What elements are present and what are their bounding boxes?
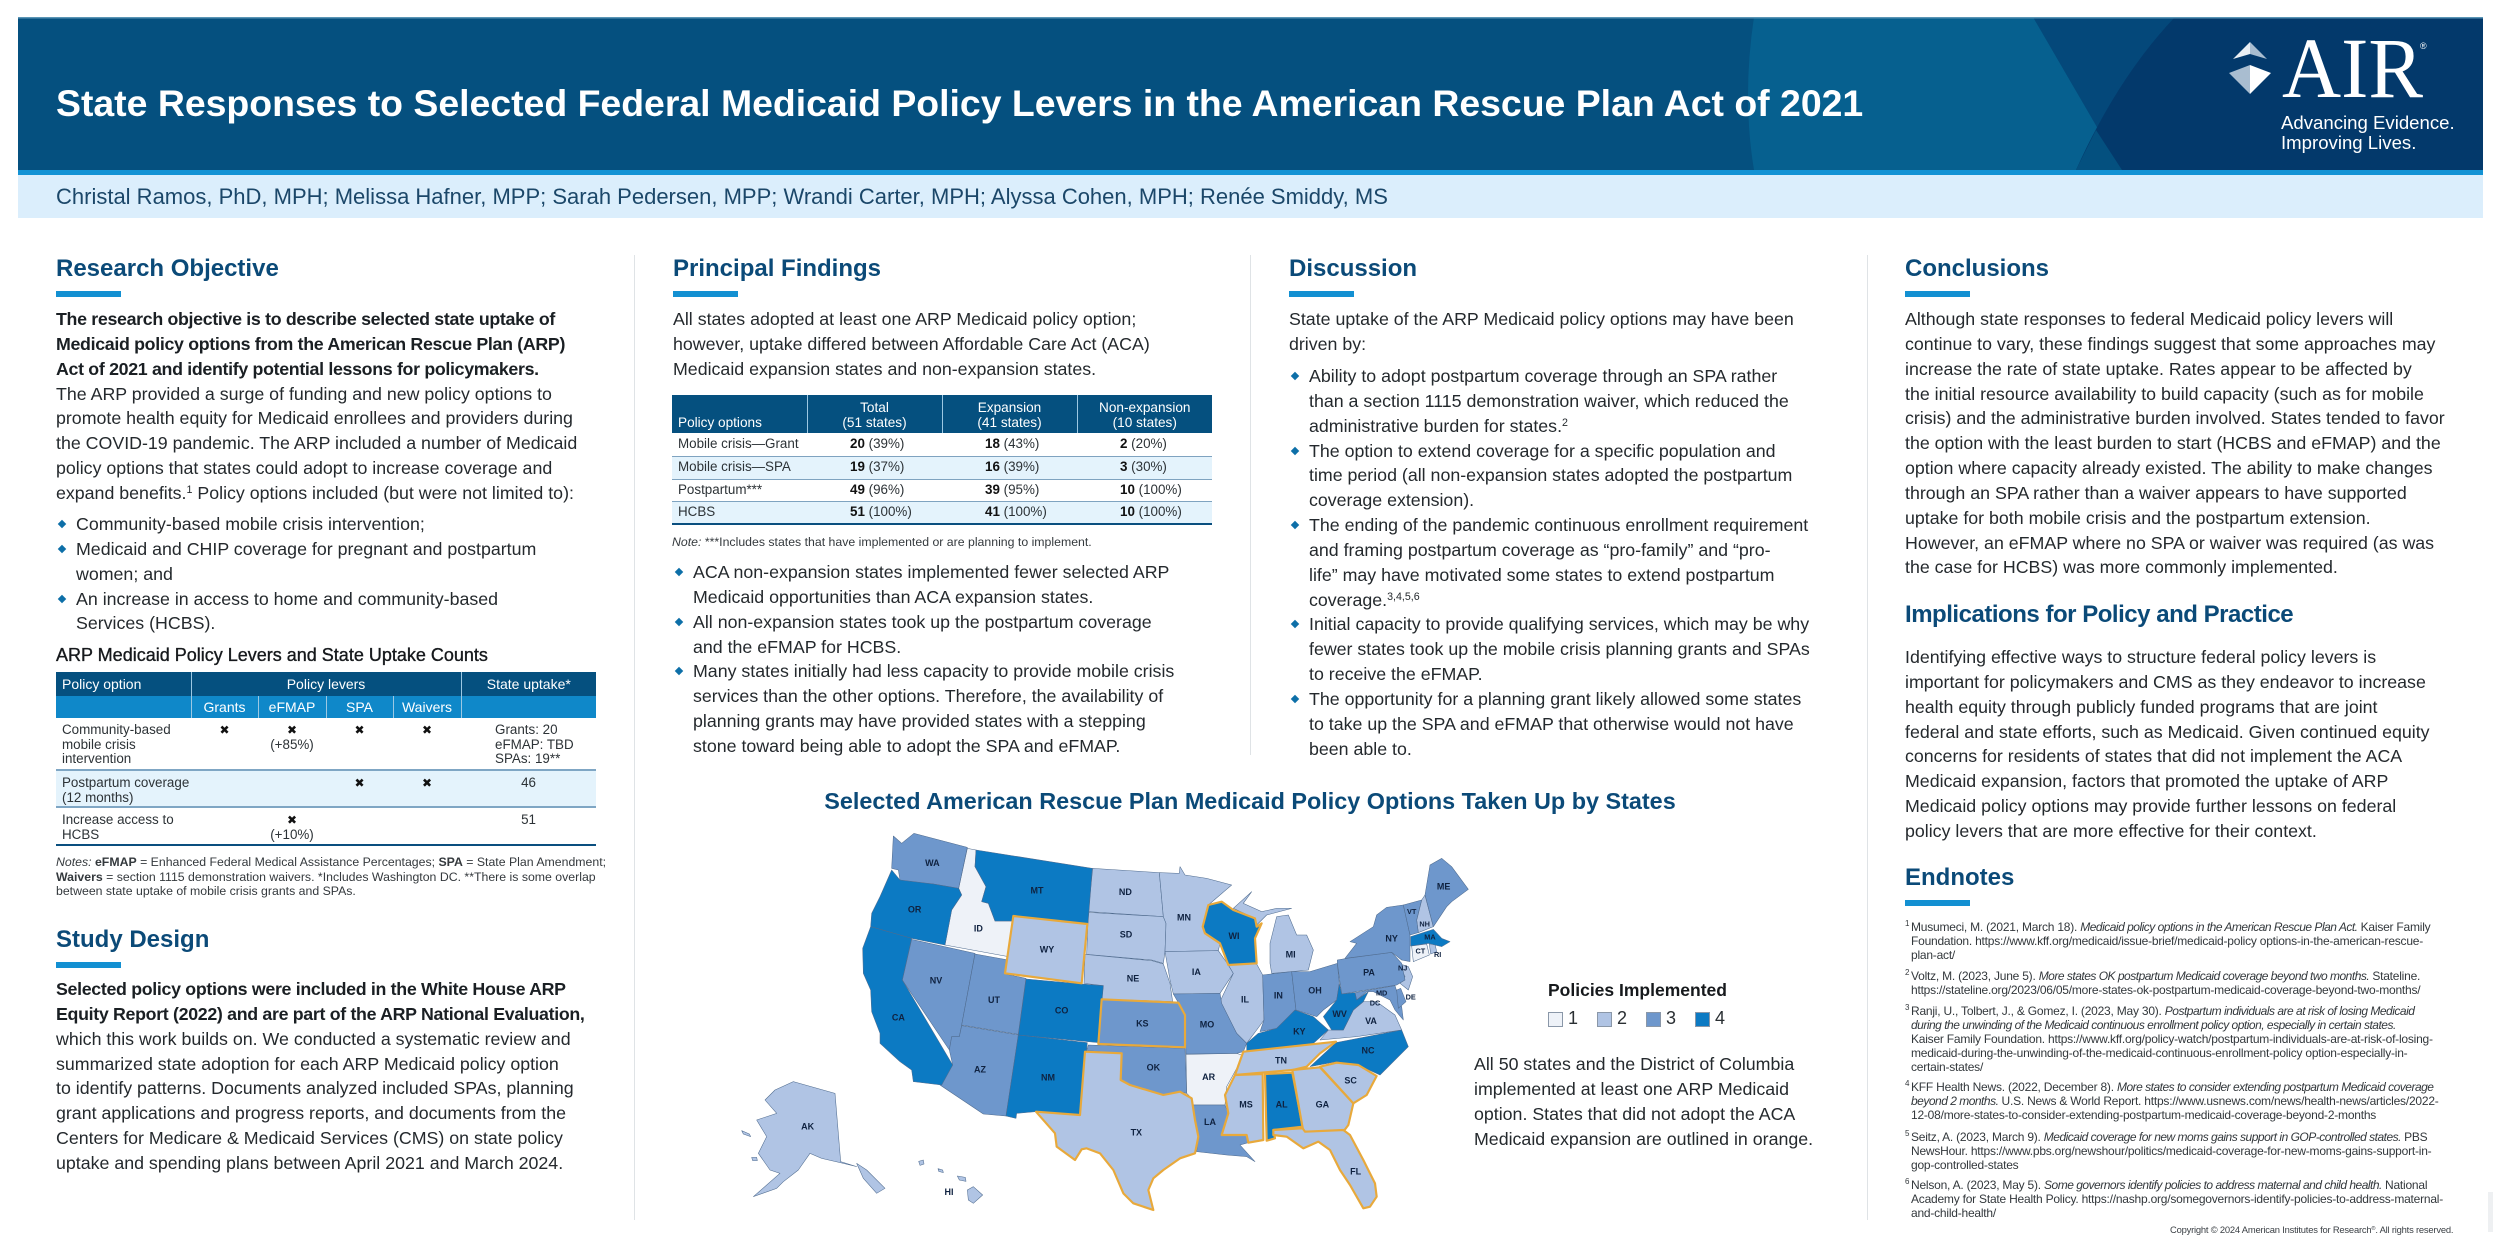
endnote 3: Kaiser Family Foundation. https://www.kff.org/policy-watch/postpartum-individuals-are-at-risk-of-losing-: [1911, 1032, 2433, 1046]
AIR logo: [2229, 32, 2455, 153]
table: state uptake: 10 (100%): [1120, 504, 1182, 519]
study design paragraph: to identify patterns. Documents analyzed included SPAs, planning: [56, 1078, 574, 1098]
endnote 6: [1905, 1177, 2443, 1220]
state abbreviations: MI: [1286, 950, 1296, 960]
implications paragraph: Identifying effective ways to structure federal policy levers is: [1905, 647, 2376, 667]
state abbreviations: HI: [944, 1187, 954, 1197]
table: policy levers: eFMAP: TBD: [495, 736, 574, 752]
AIR logo: Improving Lives.: [2281, 132, 2416, 153]
map caption: option. States that did not adopt the ACA: [1474, 1104, 1795, 1124]
endnote 4: 4: [1905, 1079, 1909, 1088]
implications paragraph: policy levers that are more effective for their context.: [1905, 821, 2317, 841]
panel: map: [741, 788, 1676, 1212]
table: state uptake: Policy options: [678, 414, 762, 430]
endnote 6: and-child-health/: [1911, 1206, 1996, 1220]
conclusions paragraph: continue to vary, these findings suggest that some approaches may: [1905, 334, 2435, 354]
conclusions paragraph: However, an eFMAP where no SPA or waiver was required (as was: [1905, 533, 2434, 553]
state abbreviations: WA: [925, 858, 940, 868]
AIR logo: Advancing Evidence.: [2281, 112, 2455, 133]
heading: study design: Study Design: [56, 926, 209, 953]
states: 1 policy: [945, 848, 1429, 1105]
table: policy levers: 46: [521, 775, 536, 790]
state abbreviations: KS: [1136, 1018, 1149, 1028]
table: state uptake: Total: [860, 400, 889, 415]
state abbreviations: GA: [1316, 1100, 1330, 1110]
endnote 1: 1: [1905, 919, 1909, 928]
state abbreviations: FL: [1350, 1166, 1362, 1176]
table: policy levers: Postpartum coverage: [62, 775, 189, 790]
map caption: All 50 states and the District of Columbia: [1474, 1054, 1794, 1074]
endnote 5: [1905, 1129, 2432, 1172]
state abbreviations: CO: [1055, 1005, 1068, 1015]
objective paragraph: Act of 2021 and identify potential lessons for policymakers.: [56, 359, 539, 379]
table: state uptake: 41 (100%): [985, 504, 1047, 519]
discussion list: time period (all non-expansion states adopted the postpartum: [1309, 465, 1792, 485]
discussion list: life” may have motivated some states to extend postpartum: [1309, 565, 1774, 585]
endnote 4: [1905, 1079, 2439, 1122]
conclusions paragraph: the case for HCBS) was more commonly implemented.: [1905, 557, 2338, 577]
state abbreviations: NE: [1127, 974, 1139, 984]
panel: research objective: [56, 255, 606, 898]
objective paragraph: The ARP provided a surge of funding and new policy options to: [56, 384, 552, 404]
text: 2: [1617, 1008, 1627, 1028]
state abbreviations: WV: [1332, 1009, 1347, 1019]
endnote 6: Nelson, A. (2023, May 5). Some governors identify policies to address maternal and child health. National: [1911, 1178, 2427, 1192]
table: state uptake: (10 states): [1113, 414, 1177, 430]
state abbreviations: MT: [1030, 885, 1044, 895]
table: policy levers: ✖: [422, 723, 432, 737]
discussion intro: driven by:: [1289, 334, 1366, 354]
discussion list: [1290, 366, 1810, 759]
table heading: ARP Medicaid Policy Levers and State Uptake Counts: [56, 645, 488, 665]
state abbreviations: NY: [1385, 933, 1398, 943]
findings list: services than the other options. Therefore, the availability of: [693, 686, 1163, 706]
discussion list: The option to extend coverage for a specific population and: [1309, 441, 1776, 461]
state abbreviations: AL: [1276, 1100, 1288, 1110]
table: state uptake: 51 (100%): [850, 504, 912, 519]
state abbreviations: MO: [1200, 1019, 1214, 1029]
heading: implications: Implications for Policy and Practice: [1905, 601, 2293, 628]
table: policy levers: Policy option: [62, 676, 141, 692]
state abbreviations: NV: [930, 976, 942, 986]
endnote 3: during the unwinding of the Medicaid continuous enrollment policy option, especially in certain states.: [1911, 1018, 2396, 1032]
state abbreviations: [801, 858, 1450, 1197]
state abbreviations: NM: [1041, 1072, 1055, 1082]
discussion list: and framing postpartum coverage as “pro-family” and “pro-: [1309, 540, 1771, 560]
policy options list: [58, 514, 536, 633]
state abbreviations: SD: [1120, 929, 1133, 939]
state abbreviations: MA: [1424, 933, 1436, 942]
table: state uptake: 10 (100%): [1120, 482, 1182, 497]
policy options list: Services (HCBS).: [76, 613, 215, 633]
table: state uptake: 18 (43%): [985, 436, 1039, 451]
table: state uptake: (41 states): [977, 414, 1042, 430]
table: policy levers: ✖: [287, 813, 297, 827]
table: state uptake: 20 (39%): [850, 436, 904, 451]
conclusions paragraph: through an SPA rather than a waiver appears to have supported: [1905, 483, 2407, 503]
state abbreviations: TN: [1275, 1055, 1287, 1065]
AIR logo: ®: [2420, 41, 2427, 51]
state abbreviations: IL: [1241, 995, 1250, 1005]
implications paragraph: [1905, 647, 2430, 841]
state abbreviations: AK: [801, 1121, 815, 1131]
table: policy levers: Grants: [203, 699, 246, 715]
policy options list: An increase in access to home and community-based: [76, 589, 498, 609]
state abbreviations: LA: [1204, 1117, 1216, 1127]
table: policy levers: [56, 672, 596, 846]
table notes: [56, 855, 606, 898]
panel: study design: [56, 926, 585, 1173]
state abbreviations: ID: [974, 924, 983, 934]
table notes: Waivers = section 1115 demonstration waivers. *Includes Washington DC. **There is some overlap: [56, 870, 596, 884]
table: state uptake: Non-expansion: [1099, 400, 1190, 415]
endnote 1: Musumeci, M. (2021, March 18). Medicaid policy options in the American Rescue Plan Act. Kaiser Family: [1911, 920, 2430, 934]
conclusions paragraph: uptake for both mobile crisis and the postpartum extension.: [1905, 508, 2371, 528]
conclusions paragraph: the option with the least burden to start (HCBS and eFMAP) and the: [1905, 433, 2441, 453]
conclusions paragraph: increase the rate of state uptake. Rates appear to be affected by: [1905, 359, 2412, 379]
state abbreviations: CT: [1415, 946, 1426, 955]
endnote 3: [1905, 1003, 2433, 1074]
endnote 4: 12-08/more-states-to-consider-extending-postpartum-medicaid-coverage-beyond-2-months: [1911, 1108, 2376, 1122]
policy options list: Community-based mobile crisis intervention;: [76, 514, 425, 534]
study design paragraph: grant applications and progress reports, and documents from the: [56, 1103, 566, 1123]
table: state uptake: Mobile crisis—SPA: [678, 459, 791, 474]
objective paragraph: expand benefits.1 Policy options included (but were not limited to):: [56, 483, 574, 503]
discussion intro: [1289, 309, 1794, 354]
states: 4 policies: [863, 850, 1450, 1118]
study design paragraph: Equity Report (2022) and are part of the ARP National Evaluation,: [56, 1004, 585, 1024]
state abbreviations: WY: [1040, 944, 1054, 954]
table: state uptake: 2 (20%): [1120, 436, 1167, 451]
findings list: planning grants may have provided states with a stepping: [693, 711, 1146, 731]
legend title: Policies Implemented: [1548, 980, 1727, 1000]
states: 3 policies: [892, 833, 1468, 1162]
endnote 2: Voltz, M. (2023, June 5). More states OK postpartum Medicaid coverage beyond two months. Stateline.: [1911, 969, 2420, 983]
panel: conclusions: [1905, 255, 2445, 577]
table: state uptake: Expansion: [978, 400, 1041, 415]
state abbreviations: WI: [1228, 931, 1240, 941]
state abbreviations: AZ: [974, 1064, 986, 1074]
title: State Responses to Selected Federal Medicaid Policy Levers in the American Rescue Plan Act of 2021: [56, 82, 1863, 124]
study design paragraph: Selected policy options were included in the White House ARP: [56, 979, 566, 999]
discussion list: The opportunity for a planning grant likely allowed some states: [1309, 689, 1801, 709]
table: policy levers: Grants: 20: [495, 722, 558, 737]
table: policy levers: ✖: [422, 776, 432, 790]
header banner: [18, 17, 2483, 218]
policy options list: Medicaid and CHIP coverage for pregnant and postpartum: [76, 539, 536, 559]
endnote 4: KFF Health News. (2022, December 8). More states to consider extending postpartum Medicaid coverage: [1911, 1080, 2433, 1094]
implications paragraph: Medicaid policy options may provide further lessons on federal: [1905, 796, 2396, 816]
panel: endnotes: [1905, 864, 2014, 906]
states: 2 policies: [742, 867, 1437, 1203]
endnote 6: Academy for State Health Policy. https://nashp.org/somegovernors-identify-policies-to-address-maternal-: [1911, 1192, 2443, 1206]
state abbreviations: AR: [1202, 1072, 1216, 1082]
discussion list: fewer states took up the mobile crisis planning grants and SPAs: [1309, 639, 1810, 659]
state abbreviations: OK: [1147, 1062, 1161, 1072]
heading: principal findings: Principal Findings: [673, 255, 881, 282]
table: policy levers: ✖: [354, 776, 365, 790]
table: policy levers: eFMAP: [269, 699, 315, 715]
table: policy levers: Increase access to: [62, 812, 174, 827]
heading: research objective: Research Objective: [56, 255, 279, 282]
endnote 5: NewsHour. https://www.pbs.org/newshour/politics/medicaid-coverage-for-new-moms-gains-support-in-: [1911, 1144, 2431, 1158]
table: policy levers: SPA: [346, 699, 373, 715]
conclusions paragraph: crisis) and the administrative burden involved. States tended to favor: [1905, 408, 2445, 428]
endnote 3: certain-states/: [1911, 1060, 1983, 1074]
endnote 1: Foundation. https://www.kff.org/medicaid/issue-brief/medicaid-policy options-in-the-american-rescue-: [1911, 934, 2423, 948]
endnote 2: https://stateline.org/2023/06/05/more-states-ok-postpartum-medicaid-coverage-beyond-two-months/: [1911, 983, 2420, 997]
study design paragraph: [56, 979, 585, 1173]
table: state uptake: HCBS: [678, 504, 715, 519]
table: policy levers: (+85%): [270, 736, 314, 752]
state abbreviations: CA: [892, 1013, 905, 1023]
discussion list: Ability to adopt postpartum coverage through an SPA rather: [1309, 366, 1777, 386]
state abbreviations: NH: [1419, 919, 1430, 928]
state abbreviations: SC: [1344, 1075, 1357, 1085]
findings list: [674, 562, 1174, 756]
table: state uptake: 19 (37%): [850, 459, 904, 474]
table: policy levers: Community-based: [62, 722, 171, 737]
implications paragraph: health equity through publicly funded programs that are joint: [1905, 697, 2378, 717]
state abbreviations: IA: [1192, 967, 1201, 977]
endnote 2: [1905, 968, 2421, 997]
authors band: Christal Ramos, PhD, MPH; Melissa Hafner, MPP; Sarah Pedersen, MPP; Wrandi Carter, MPH; Alyssa Cohen, MPH; Renée Smiddy, MS: [56, 184, 1388, 209]
table notes: between state uptake of mobile crisis grants and SPAs.: [56, 884, 356, 898]
state abbreviations: OR: [908, 905, 922, 915]
objective paragraph: promote health equity for Medicaid enrollees and providers during: [56, 408, 573, 428]
state abbreviations: NC: [1362, 1046, 1375, 1056]
objective paragraph: Medicaid policy options from the American Rescue Plan (ARP): [56, 334, 565, 354]
conclusions paragraph: the initial resource availability to build capacity (such as for mobile: [1905, 384, 2424, 404]
table: policy levers: HCBS: [62, 826, 99, 842]
state abbreviations: RI: [1434, 950, 1441, 959]
endnote 3: medicaid-during-the-unwinding-of-the-medicaid-continuous-enrollment-policy option-especially-in-: [1911, 1046, 2407, 1060]
implications paragraph: federal and state efforts, such as Medicaid. Given continued equity: [1905, 722, 2430, 742]
table: state uptake: 49 (96%): [850, 482, 904, 497]
heading: discussion: Discussion: [1289, 255, 1417, 282]
endnote 1: [1905, 919, 2431, 962]
discussion list: Initial capacity to provide qualifying services, which may be why: [1309, 614, 1809, 634]
objective paragraph: the COVID-19 pandemic. The ARP included a number of Medicaid: [56, 433, 577, 453]
table notes: Notes: eFMAP = Enhanced Federal Medical Assistance Percentages; SPA = State Plan Amendment;: [56, 855, 606, 869]
endnote 3: Ranji, U., Tolbert, J., & Gomez, I. (2023, May 30). Postpartum individuals are at risk of losing Medicaid: [1911, 1004, 2414, 1018]
map caption: [1474, 1054, 1813, 1149]
panel: implications: [1905, 601, 2430, 841]
discussion list: been able to.: [1309, 739, 1412, 759]
state abbreviations: KY: [1293, 1027, 1306, 1037]
discussion list: administrative burden for states.2: [1309, 416, 1568, 436]
implications paragraph: concerns for residents of states that did not implement the ACA: [1905, 746, 2402, 766]
conclusions paragraph: Although state responses to federal Medicaid policy levers will: [1905, 309, 2393, 329]
heading: conclusions: Conclusions: [1905, 255, 2049, 282]
map title: Selected American Rescue Plan Medicaid Policy Options Taken Up by States: [824, 788, 1676, 814]
table: policy levers: mobile crisis: [62, 736, 136, 752]
table: policy levers: ✖: [219, 723, 230, 737]
conclusions paragraph: [1905, 309, 2445, 577]
table: state uptake: Mobile crisis—Grant: [678, 436, 799, 451]
map caption: Medicaid expansion are outlined in orange.: [1474, 1129, 1813, 1149]
table: policy levers: State uptake*: [487, 676, 571, 692]
state abbreviations: MN: [1177, 912, 1191, 922]
objective paragraph: The research objective is to describe selected state uptake of: [56, 309, 555, 329]
findings intro: Medicaid expansion states and non-expansion states.: [673, 359, 1096, 379]
panel: discussion: [1289, 255, 1810, 759]
state abbreviations: UT: [988, 995, 1000, 1005]
discussion list: coverage extension).: [1309, 490, 1474, 510]
endnote 1: plan-act/: [1911, 948, 1955, 962]
findings list: Many states initially had less capacity to provide mobile crisis: [693, 661, 1174, 681]
endnote 5: gop-controlled-states: [1911, 1158, 2018, 1172]
findings list: ACA non-expansion states implemented fewer selected ARP: [693, 562, 1169, 582]
state abbreviations: IN: [1274, 991, 1283, 1001]
non-expansion states outlined in orange: [1005, 902, 1377, 1210]
map caption: implemented at least one ARP Medicaid: [1474, 1079, 1789, 1099]
authors band: [18, 175, 2483, 218]
state abbreviations: ME: [1437, 882, 1450, 892]
table: policy levers: ✖: [354, 723, 365, 737]
discussion list: than a section 1115 demonstration waiver, which reduced the: [1309, 391, 1789, 411]
heading: endnotes: Endnotes: [1905, 864, 2014, 891]
findings intro: All states adopted at least one ARP Medicaid policy option;: [673, 309, 1136, 329]
state abbreviations: OH: [1308, 986, 1322, 996]
endnote 5: Seitz, A. (2023, March 9). Medicaid coverage for new moms gains support in GOP-controlled states. PBS: [1911, 1130, 2427, 1144]
table: policy levers: 51: [521, 812, 536, 827]
copyright: Copyright © 2024 American Institutes for Research®. All rights reserved.: [2170, 1224, 2453, 1235]
table: policy levers: Waivers: [402, 699, 452, 715]
policy options list: women; and: [76, 564, 173, 584]
table: policy levers: SPAs: 19**: [495, 751, 560, 766]
implications paragraph: important for policymakers and CMS as they endeavor to increase: [1905, 672, 2426, 692]
state abbreviations: DE: [1406, 992, 1416, 1001]
table: state uptake: (51 states): [842, 414, 907, 430]
state abbreviations: PA: [1363, 968, 1375, 978]
table: state uptake: 39 (95%): [985, 482, 1039, 497]
findings intro: however, uptake differed between Affordable Care Act (ACA): [673, 334, 1150, 354]
findings list: and the eFMAP for HCBS.: [693, 637, 901, 657]
state abbreviations: MD: [1376, 988, 1387, 997]
discussion list: to receive the eFMAP.: [1309, 664, 1483, 684]
table note: Note: ***Includes states that have implemented or are planning to implement.: [672, 535, 1092, 549]
discussion list: The ending of the pandemic continuous enrollment requirement: [1309, 515, 1808, 535]
state abbreviations: NJ: [1398, 963, 1407, 972]
study design paragraph: which this work builds on. We conducted a systematic review and: [56, 1029, 571, 1049]
implications paragraph: Medicaid expansion, factors that promoted the uptake of ARP: [1905, 771, 2388, 791]
state abbreviations: TX: [1131, 1128, 1142, 1138]
table: state uptake: 16 (39%): [985, 459, 1039, 474]
discussion intro: State uptake of the ARP Medicaid policy options may have been: [1289, 309, 1794, 329]
table: state uptake: 3 (30%): [1120, 459, 1167, 474]
study design paragraph: uptake and spending plans between April 2021 and March 2024.: [56, 1153, 563, 1173]
table: state uptake: Postpartum***: [678, 482, 762, 497]
table: policy levers: (+10%): [270, 826, 314, 842]
state abbreviations: ND: [1119, 887, 1132, 897]
table: policy levers: ✖: [287, 723, 297, 737]
findings list: stone toward being able to adopt the SPA and eFMAP.: [693, 736, 1120, 756]
study design paragraph: summarized state adoption for each ARP Medicaid policy option: [56, 1054, 559, 1074]
text: 3: [1666, 1008, 1676, 1028]
findings list: Medicaid opportunities than ACA expansion states.: [693, 587, 1093, 607]
discussion list: coverage.3,4,5,6: [1309, 590, 1420, 610]
text: 1: [1568, 1008, 1578, 1028]
objective paragraph: policy options that states could adopt to increase coverage and: [56, 458, 552, 478]
findings intro: [673, 309, 1150, 379]
table: policy levers: (12 months): [62, 790, 133, 804]
endnote 6: 6: [1905, 1177, 1909, 1186]
US choropleth map: [741, 833, 1469, 1212]
objective paragraph: [56, 309, 577, 503]
endnote 5: 5: [1905, 1129, 1909, 1138]
state abbreviations: VT: [1407, 907, 1417, 916]
panel: principal findings: [672, 255, 1212, 756]
text: 4: [1715, 1008, 1725, 1028]
endnote 4: beyond 2 months. U.S. News & World Report. https://www.usnews.com/news/health-news/articles/2022-: [1911, 1094, 2439, 1108]
state abbreviations: VA: [1365, 1016, 1377, 1026]
conclusions paragraph: option where capacity already existed. The ability to make changes: [1905, 458, 2432, 478]
table: state uptake: [672, 395, 1212, 525]
study design paragraph: Centers for Medicare & Medicaid Services (CMS) on state policy: [56, 1128, 563, 1148]
state abbreviations: MS: [1239, 1099, 1253, 1109]
endnote 2: 2: [1905, 968, 1909, 977]
table: policy levers: intervention: [62, 751, 131, 766]
state abbreviations: DC: [1370, 998, 1381, 1007]
findings list: All non-expansion states took up the postpartum coverage: [693, 612, 1152, 632]
discussion list: to take up the SPA and eFMAP that otherwise would not have: [1309, 714, 1794, 734]
endnote 3: 3: [1905, 1003, 1909, 1012]
table: policy levers: Policy levers: [287, 676, 365, 692]
